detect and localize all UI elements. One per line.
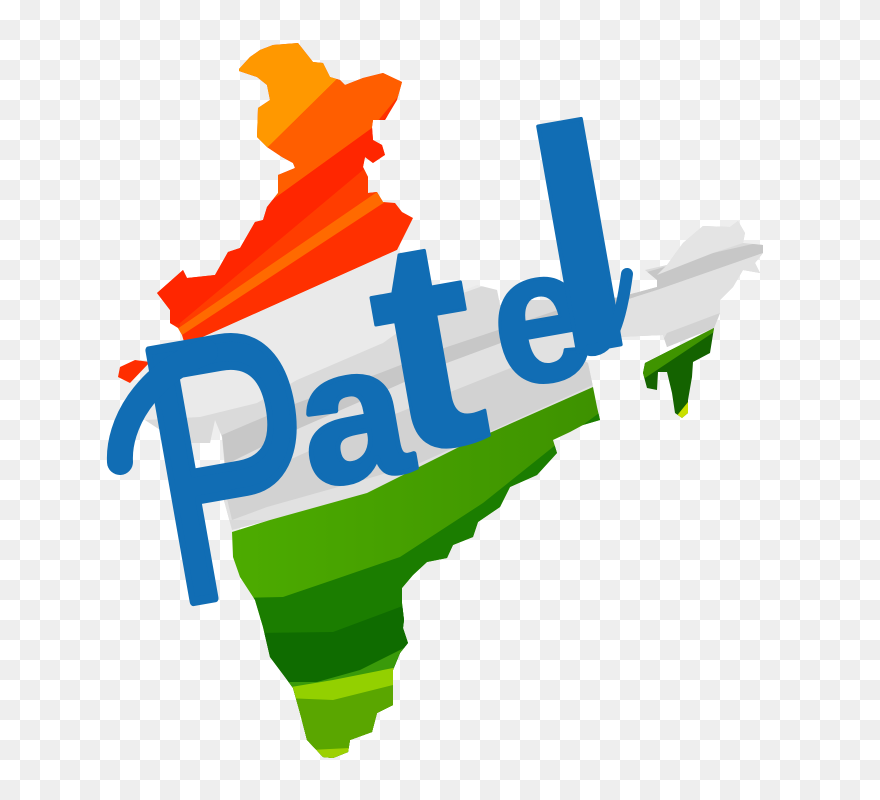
map region: green north-east tail (643, 328, 714, 418)
flourish: tail stroke after the final letter (590, 274, 627, 350)
title: Patel lettering: P (115, 248, 349, 683)
map region: white-grey central band (145, 221, 763, 530)
flourish: left swash of the initial letter (120, 352, 205, 462)
light grey lower body (234, 254, 760, 461)
map region: saffron north (157, 43, 413, 340)
upper north-east lighter shade (657, 221, 745, 275)
title: Patel lettering: a (282, 300, 424, 528)
title: Patel lettering: t (348, 169, 504, 517)
title: Patel lettering: l (507, 59, 654, 422)
title: Patel lettering: e (473, 203, 607, 429)
dark grey diagonal stripe (222, 243, 763, 465)
darker grey lower stripe (225, 360, 595, 520)
map region: small western red tip (118, 360, 150, 383)
map region: green south (232, 387, 600, 758)
north-east grey lower stripe (664, 314, 720, 347)
grey shade layer (145, 224, 752, 530)
